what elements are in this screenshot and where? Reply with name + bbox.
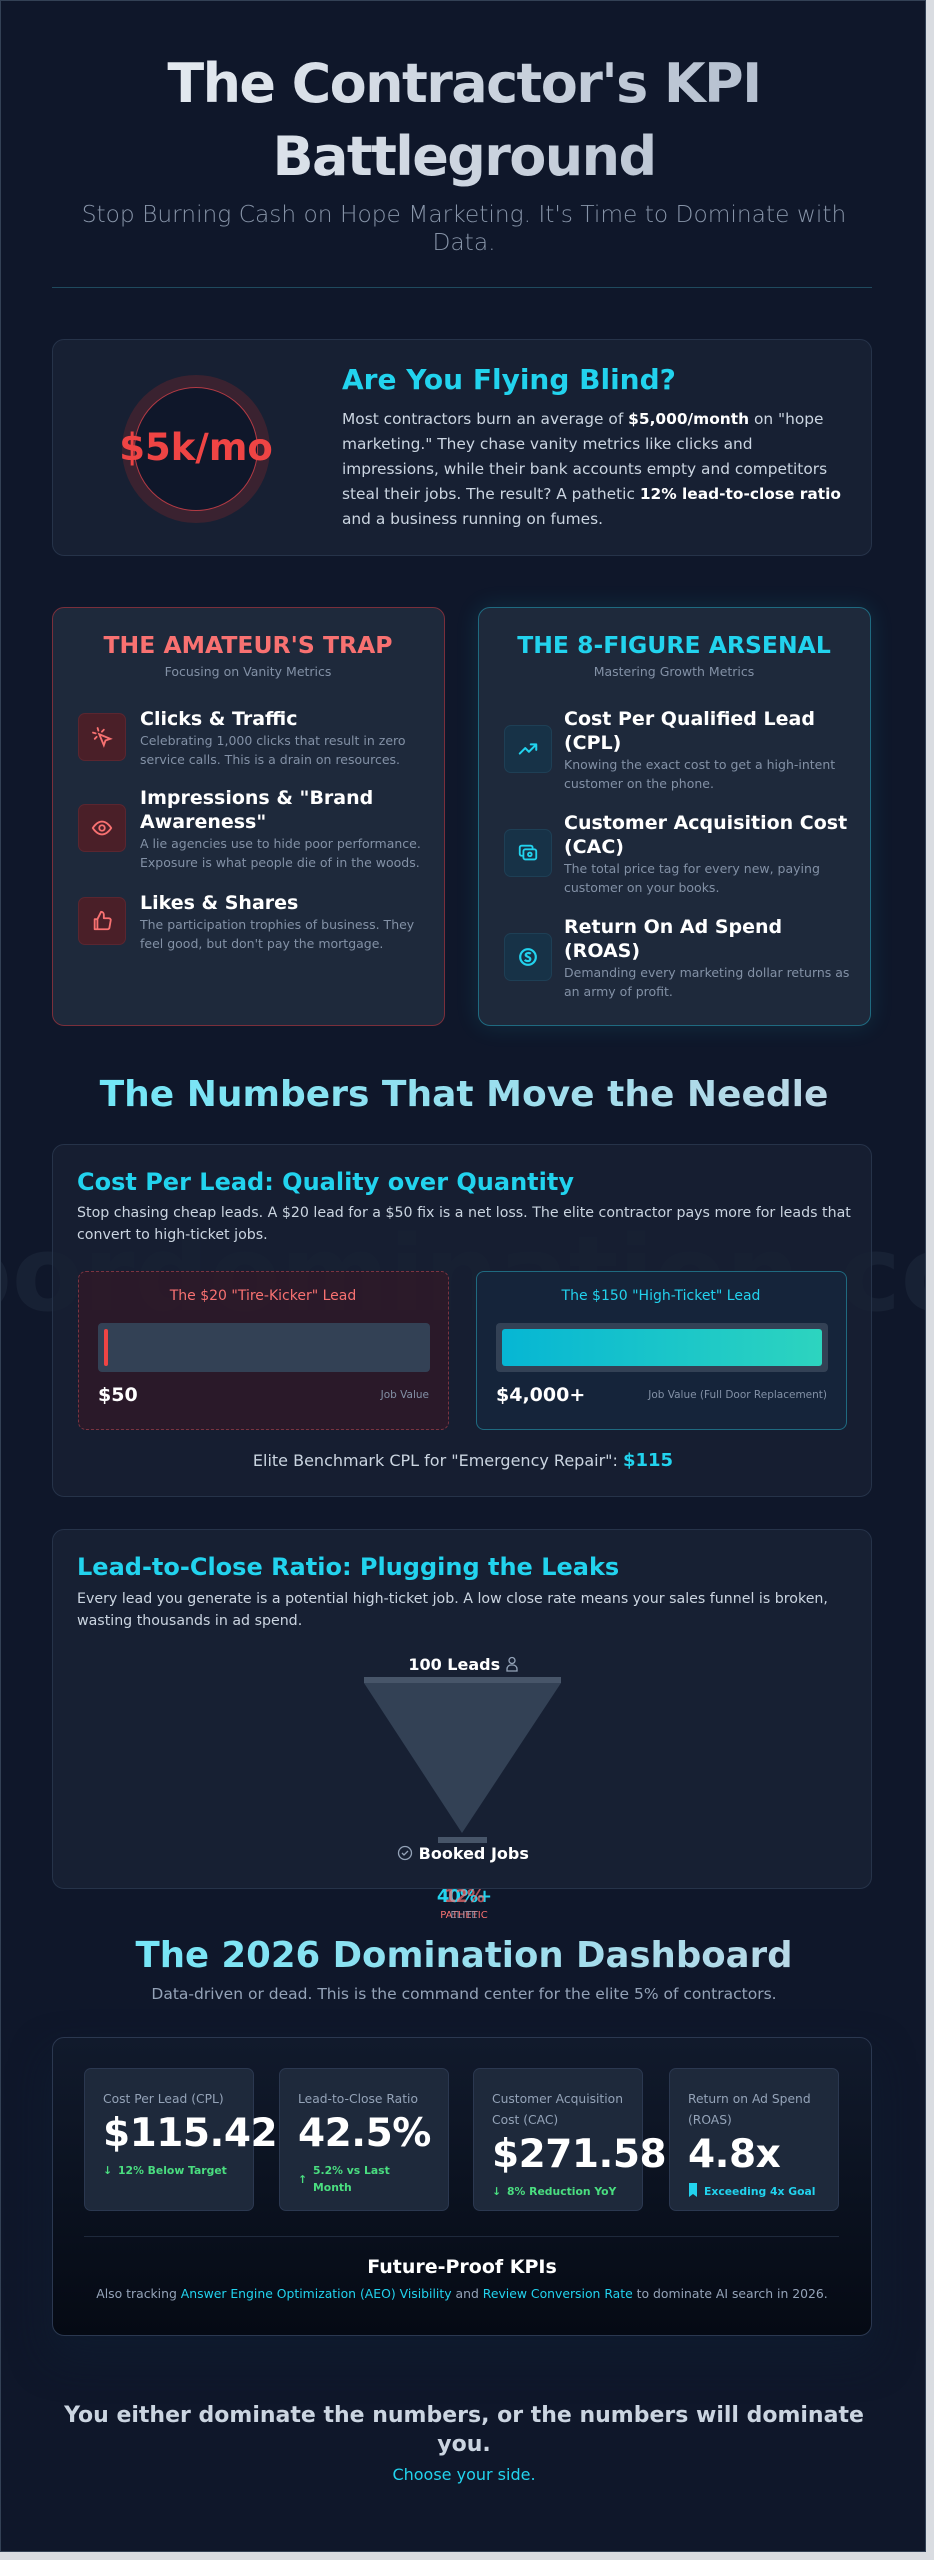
bar chart: tire-kicker: Job Value [381,1389,429,1401]
callout: overlapping ratio labels [437,1886,491,1921]
metric: CPL: 12% Below Target [118,2164,227,2177]
callout: overlapping ratio labels: ELITE [450,1910,478,1921]
heading: dashboard [1,1932,927,1980]
metric: CPL: ↓ [103,2164,112,2177]
title: Battleground [272,125,656,188]
heading: numbers [1,1071,927,1119]
metric: ROAS: Exceeding 4x Goal [704,2185,816,2198]
callout: benchmark: Elite Benchmark CPL for "Emergency Repair": $115 [253,1450,673,1471]
panel: amateur's trap: Focusing on Vanity Metrics [165,664,331,679]
metric: CAC: 8% Reduction YoY [507,2185,616,2198]
icon: $5k/mo ring: $5k/mo [119,426,273,469]
icon: $5k/mo ring [122,375,270,523]
heading: Are You Flying Blind? [342,363,676,396]
bar chart: high-ticket [476,1271,847,1430]
metric: CAC: $271.58 [492,2132,666,2177]
metric: close ratio: 5.2% vs Last [313,2164,390,2177]
title: The Contractor's KPI [167,52,761,115]
metric: CAC: Customer Acquisition [492,2092,623,2106]
heading: Cost Per Lead: Quality over Quantity [77,1168,574,1196]
bar chart: tire-kicker: The $20 "Tire-Kicker" Lead [170,1288,356,1304]
metric: CAC [473,2068,643,2211]
metric: CPL: Cost Per Lead (CPL) [103,2092,224,2106]
metric: CAC: ↓ [492,2185,501,2198]
metric: CPL [84,2068,254,2211]
panel: cost per lead [52,1144,872,1497]
callout: overlapping ratio labels: 40%+ [437,1886,491,1907]
subtitle: Stop Burning Cash on Hope Marketing. It's Time to Dominate with Data. [82,201,846,256]
item: likes: Likes & Shares [140,892,298,914]
item: CPL: Knowing the exact cost to get a high-intent customer on the phone. [564,757,835,790]
metric: close ratio: Month [313,2181,352,2194]
panel: flying blind [52,339,872,556]
chart: funnel: Booked Jobs [419,1844,529,1863]
metric: ROAS: 4.8x [688,2132,780,2177]
metric: ROAS: Return on Ad Spend [688,2092,811,2106]
metric: close ratio: 42.5% [298,2111,431,2156]
heading: dashboard: The 2026 Domination Dashboard [136,1935,792,1976]
bar chart: tire-kicker: $50 [98,1384,138,1406]
metric: ROAS: (ROAS) [688,2113,732,2127]
item: impressions: Impressions & "Brand Awareness" [140,787,373,833]
heading: THE 8-FIGURE ARSENAL [517,631,831,659]
metric: CAC: Cost (CAC) [492,2113,558,2127]
item: clicks [78,708,406,766]
metric: ROAS [669,2068,839,2211]
text block: Most contractors burn an average of $5,000/month on "hope marketing." They chase vanity metrics like clicks and impressions, while their bank accounts empty and competitors steal their jobs. The result? A pathetic 12% lead-to-close ratio and a business running on fumes. [342,410,841,528]
icon: thumbs up [78,897,126,945]
text: Data-driven or dead. This is the command center for the elite 5% of contractors. [151,1985,777,2003]
item: likes [78,892,414,950]
title [1,47,927,193]
item: CPL: Cost Per Qualified Lead (CPL) [564,708,815,754]
bar chart: high-ticket: Job Value (Full Door Replacement) [648,1389,827,1401]
item: likes: The participation trophies of business. They feel good, but don't pay the mortgage. [140,917,414,950]
icon: cash [504,829,552,877]
icon: trend [504,725,552,773]
footer: Choose your side. [392,2465,536,2484]
panel: dashboard [52,2037,872,2336]
text block: Every lead you generate is a potential high-ticket job. A low close rate means your sales funnel is broken, wasting thousands in ad spend. [77,1591,828,1629]
item: CAC [504,812,847,894]
text block: future-proof: Future-Proof KPIs [367,2256,557,2278]
item: CAC: Customer Acquisition Cost (CAC) [564,812,847,858]
item: clicks: Clicks & Traffic [140,708,298,730]
item: CAC: The total price tag for every new, paying customer on your books. [564,861,820,894]
icon: eye [78,804,126,852]
callout: overlapping ratio labels: 12% [444,1886,484,1907]
metric: close ratio: Lead-to-Close Ratio [298,2092,418,2106]
item: ROAS [504,916,849,998]
item: ROAS: Demanding every marketing dollar returns as an army of profit. [564,965,849,998]
icon: cursor click [78,713,126,761]
heading: numbers: The Numbers That Move the Needle [100,1074,828,1115]
metric: close ratio [279,2068,449,2211]
panel: 8-figure arsenal: Mastering Growth Metrics [594,664,754,679]
bar chart: high-ticket: $4,000+ [496,1384,585,1406]
item: impressions [78,787,421,870]
text block: future-proof [96,2256,828,2301]
panel: amateur's trap [52,607,445,1026]
item: impressions: A lie agencies use to hide poor performance. Exposure is what people die of in the woods. [140,836,421,870]
metric: CPL: $115.42 [103,2111,277,2156]
heading: THE AMATEUR'S TRAP [104,631,392,659]
bar chart: high-ticket: The $150 "High-Ticket" Lead [562,1288,760,1304]
item: CPL [504,708,835,790]
footer [64,2403,864,2484]
panel: lead-to-close [52,1529,872,1889]
chart: funnel [364,1655,561,1863]
bar chart: tire-kicker [78,1271,449,1430]
heading: Lead-to-Close Ratio: Plugging the Leaks [77,1553,619,1581]
metric: close ratio: ↑ [298,2172,307,2186]
chart: funnel: 100 Leads [408,1655,500,1674]
text block: Stop chasing cheap leads. A $20 lead for a $50 fix is a net loss. The elite contractor pays more for leads that convert to high-ticket jobs. [77,1205,851,1243]
text block: future-proof: Also tracking Answer Engine Optimization (AEO) Visibility and Review Conversion Rate to dominate AI search in 2026. [96,2286,828,2301]
panel: 8-figure arsenal [478,607,871,1026]
icon: coin [504,933,552,981]
item: ROAS: Return On Ad Spend (ROAS) [564,916,782,962]
item: clicks: Celebrating 1,000 clicks that result in zero service calls. This is a drain on resources. [140,733,406,766]
footer: You either dominate the numbers, or the numbers will dominate you. [64,2403,864,2457]
callout: overlapping ratio labels: PATHETIC [440,1910,488,1921]
